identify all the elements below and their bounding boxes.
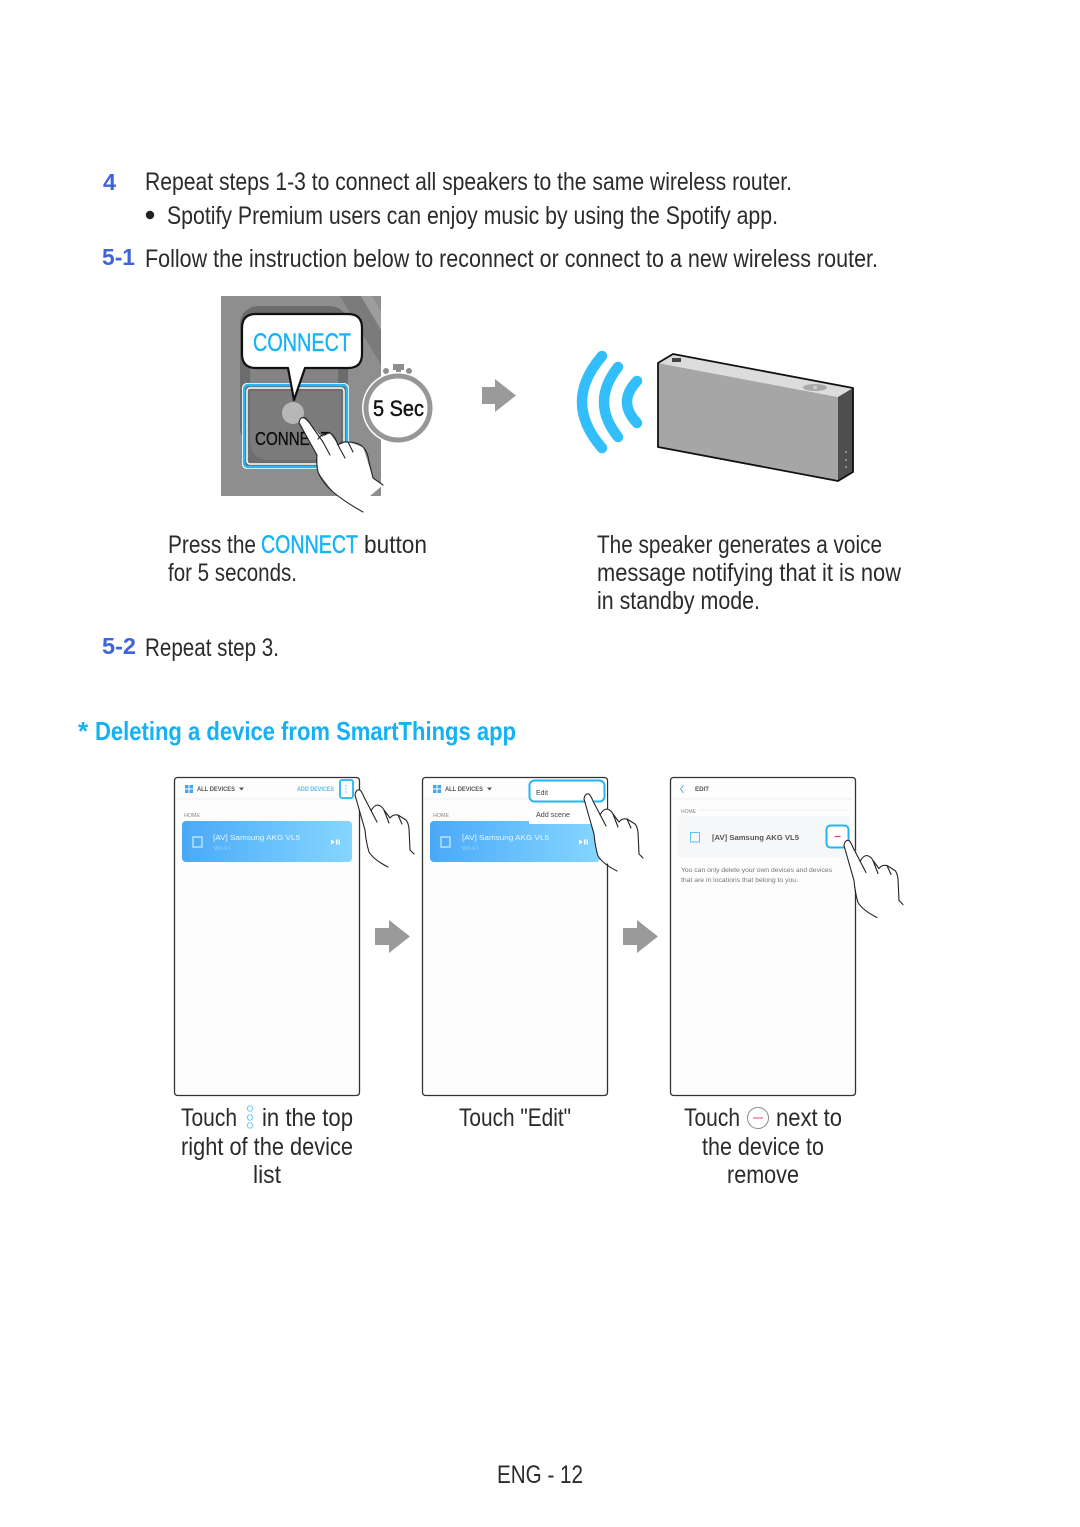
caption: press connect: button [364, 531, 427, 559]
illustration: speaker [658, 354, 853, 481]
step 5-2 text [102, 633, 279, 662]
hand: tap remove [844, 840, 903, 918]
popup menu: Add scene [536, 812, 570, 819]
step 5-2 text: 5-2 [102, 633, 136, 659]
caption: press connect: CONNECT [261, 531, 358, 559]
caption: screen 2: Touch "Edit" [459, 1104, 571, 1132]
heading: deleting a device: * [78, 716, 89, 746]
popup menu [529, 780, 607, 824]
note text [681, 867, 833, 884]
device card [182, 821, 352, 862]
icon: three dots [247, 1106, 253, 1128]
note text: that are in locations that belong to you. [681, 877, 798, 884]
hand: tap edit [584, 794, 643, 871]
device card [430, 821, 600, 862]
caption: press connect [168, 531, 427, 587]
arrow: step 5-1 [482, 379, 516, 412]
step 5-1 text: 5-1 [102, 244, 135, 270]
caption: screen 3: next to [776, 1104, 842, 1132]
connect button [282, 402, 304, 424]
device card: [AV] Samsung AKG VL5 [462, 833, 549, 842]
caption: press connect: Press the [168, 531, 256, 559]
caption: screen 3: the device to [702, 1133, 824, 1161]
caption: screen 1: right of the device [181, 1133, 353, 1161]
illustration: press connect button: CONNECT [255, 429, 330, 449]
stopwatch 5 sec: 5 Sec [373, 396, 424, 421]
caption: screen 1: in the top [262, 1104, 353, 1132]
blue highlight frame [242, 383, 349, 469]
bullet: Spotify note: Spotify Premium users can enjoy music by using the Spotify app. [167, 202, 778, 230]
device card: [AV] Samsung AKG VL5 [213, 833, 300, 842]
stopwatch 5 sec [362, 364, 434, 444]
phone screen 2: ALL DEVICES [445, 786, 484, 793]
speech bubble [242, 314, 362, 400]
step 5-2 text: Repeat step 3. [145, 634, 279, 662]
caption: speaker standby [597, 531, 902, 615]
highlight: menu dots [340, 780, 353, 798]
popup menu: Edit [536, 790, 548, 797]
caption: screen 1: Touch [181, 1104, 237, 1132]
step 4 text: Repeat steps 1-3 to connect all speakers to the same wireless router. [145, 168, 792, 196]
step 4 text: 4 [103, 169, 116, 195]
hand pressing button [299, 418, 383, 512]
arrow: screen 1 to 2 [375, 920, 410, 953]
caption: speaker standby: The speaker generates a voice [597, 531, 882, 559]
page number: ENG - 12 [497, 1461, 583, 1489]
arrow: screen 2 to 3 [623, 920, 658, 953]
caption: press connect: for 5 seconds. [168, 559, 297, 587]
icon: wireless waves [582, 356, 637, 448]
caption: speaker standby: in standby mode. [597, 587, 760, 615]
phone screen 2 [422, 778, 608, 1096]
icon: minus circle [748, 1108, 768, 1128]
phone screen 1: ADD DEVICES [297, 786, 335, 793]
caption: screen 3 [684, 1104, 842, 1189]
phone screen 3: HOME [681, 809, 696, 815]
note text: You can only delete your own devices and devices [681, 867, 833, 874]
phone screen 3: EDIT [695, 786, 709, 793]
phone screen 1: HOME [184, 813, 200, 819]
caption: speaker standby: message notifying that it is now [597, 559, 902, 587]
phone screen 3 [670, 778, 856, 1096]
highlight: remove button [826, 826, 848, 848]
step 5-1 text: Follow the instruction below to reconnect or connect to a new wireless router. [145, 245, 878, 273]
device card: Wi-Fi [214, 846, 230, 852]
phone screen 1 [174, 778, 360, 1096]
device row [678, 816, 850, 857]
icon: grid [185, 785, 193, 793]
device row: [AV] Samsung AKG VL5 [712, 833, 799, 842]
hand: tap menu [355, 790, 414, 867]
caption: screen 3: remove [727, 1161, 799, 1189]
phone screen 1: ALL DEVICES [197, 786, 236, 793]
caption: screen 3: Touch [684, 1104, 740, 1132]
illustration: press connect button [221, 296, 434, 512]
caption: screen 1: list [253, 1161, 281, 1189]
phone screen 2: HOME [433, 813, 449, 819]
heading: deleting a device: Deleting a device from SmartThings app [95, 716, 516, 746]
illustration: press connect button: CONNECT [253, 329, 351, 357]
device card: Wi-Fi [462, 846, 478, 852]
caption: screen 1 [181, 1104, 353, 1189]
